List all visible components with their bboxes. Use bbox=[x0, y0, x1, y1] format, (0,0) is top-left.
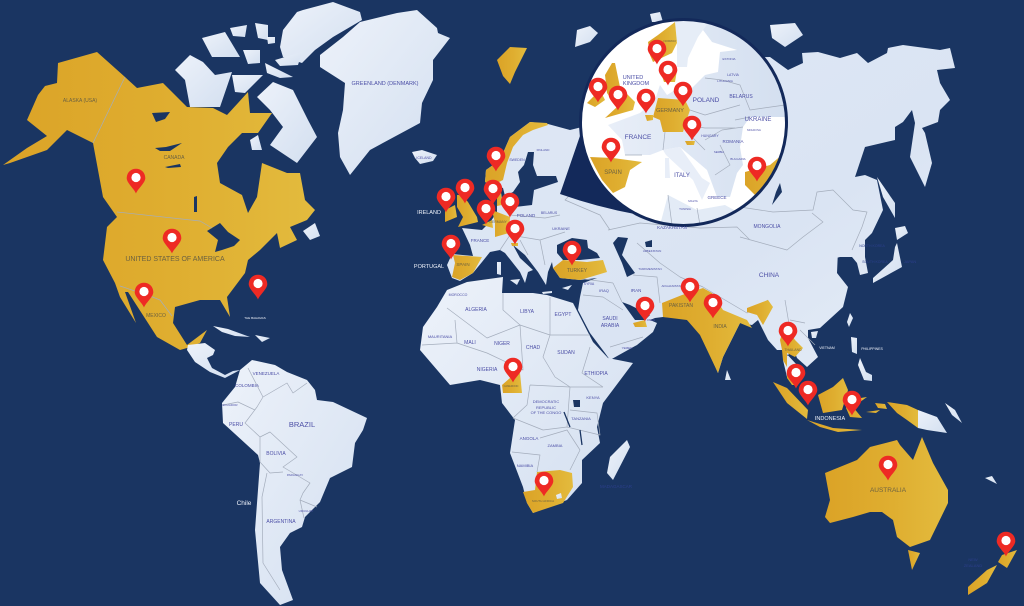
country labels: Africa: NAMIBIA bbox=[517, 463, 534, 468]
Great Lakes and Canadian lakes bbox=[152, 112, 240, 252]
South America bbox=[222, 360, 367, 605]
inset: borders bbox=[625, 78, 785, 225]
inset: country labels: GERMANY bbox=[656, 108, 684, 114]
location pins: Americas bbox=[127, 169, 267, 308]
inset: country labels: BULGARIA bbox=[730, 157, 746, 161]
country labels: Asia and Oceania: OMAN bbox=[647, 318, 655, 322]
New Zealand bbox=[968, 550, 1017, 595]
inset magnifier circle: Europe bbox=[579, 18, 788, 227]
inset: country labels: UNITED bbox=[623, 75, 643, 81]
inset: country labels: SPAIN bbox=[604, 170, 622, 176]
country labels: Africa: OF THE CONGO bbox=[531, 410, 561, 415]
country labels: Asia and Oceania: SAUDI bbox=[602, 316, 618, 322]
Central America bbox=[187, 343, 240, 378]
country labels: Greenland and Europe: UKRAINE bbox=[552, 226, 570, 231]
country labels: Africa: EGYPT bbox=[555, 312, 571, 318]
country labels: Asia and Oceania: SOUTH KOREA bbox=[862, 260, 888, 264]
country labels: Greenland and Europe: GERMANY bbox=[489, 220, 508, 224]
country labels: Greenland and Europe: TURKEY bbox=[567, 268, 588, 274]
Lesotho bbox=[556, 493, 562, 499]
country labels: Americas: UNITED STATES OF AMERICA bbox=[125, 256, 225, 263]
inland seas: Black Sea, Caspian, Persian Gulf, Aral, Baikal bbox=[557, 183, 782, 320]
country labels: Greenland and Europe: FINLAND bbox=[537, 148, 550, 152]
inset: Corsica and Sardinia bbox=[665, 158, 670, 178]
inset: European land bbox=[608, 24, 785, 197]
Mediterranean islands bbox=[497, 262, 572, 294]
country labels: Africa: ETHIOPIA bbox=[584, 371, 608, 377]
country labels: Africa: MAURITANIA bbox=[428, 334, 453, 339]
country labels: Americas: URUGUAY bbox=[299, 509, 313, 513]
country labels: Africa: MOROCCO bbox=[449, 293, 468, 297]
country labels: Asia and Oceania: PAKISTAN bbox=[669, 303, 693, 309]
North America gold landmass bbox=[3, 52, 315, 350]
country labels: Asia and Oceania: JAPAN bbox=[904, 259, 916, 264]
inset: country labels: MOLDOVA bbox=[747, 128, 761, 132]
South America borders bbox=[223, 368, 317, 590]
country labels: Americas: BRAZIL bbox=[289, 420, 315, 429]
country labels: Asia and Oceania: NEW bbox=[968, 557, 978, 562]
location pins: Asia and Oceania bbox=[636, 278, 1015, 556]
country labels: Greenland and Europe: FRANCE bbox=[471, 238, 489, 243]
inset: Italy bbox=[663, 147, 710, 200]
country labels: Asia and Oceania: AFGHANISTAN bbox=[661, 284, 683, 288]
Eurasia bbox=[447, 45, 955, 383]
inset: country labels bbox=[604, 39, 771, 211]
country labels: Africa: NIGERIA bbox=[477, 367, 498, 373]
country labels: Greenland and Europe: SWEDEN bbox=[509, 158, 525, 162]
country labels: Africa: SOUTH AFRICA bbox=[532, 499, 554, 503]
country labels: Americas: Chile bbox=[237, 500, 252, 507]
inset: country labels: TUNISIA bbox=[679, 207, 691, 211]
country labels: Asia and Oceania: MONGOLIA bbox=[754, 224, 781, 230]
country labels: Asia and Oceania: NORTH KOREA bbox=[859, 244, 885, 248]
country labels: Greenland and Europe: BELARUS bbox=[541, 211, 558, 215]
Asia-Pacific pale islands bbox=[725, 177, 997, 484]
country labels: Africa: SUDAN bbox=[557, 350, 575, 356]
country labels: Africa: CAMEROON bbox=[504, 385, 519, 388]
country labels: Americas: PERU bbox=[229, 422, 243, 428]
country labels: Asia and Oceania: AUSTRALIA bbox=[870, 487, 907, 494]
Madagascar bbox=[607, 440, 630, 480]
country labels: Africa: DEMOCRATIC bbox=[533, 399, 559, 404]
country labels: Americas: CANADA bbox=[164, 155, 185, 161]
country labels: Asia and Oceania: ZEALAND bbox=[964, 563, 982, 568]
country labels: Americas: ARGENTINA bbox=[266, 519, 296, 525]
inset: gold countries bbox=[587, 22, 790, 195]
inset: country labels: KINGDOM bbox=[623, 81, 650, 87]
country labels: Americas: ECUADOR bbox=[222, 403, 238, 407]
Greenland bbox=[320, 10, 450, 175]
country labels: Africa: KENYA bbox=[586, 395, 600, 400]
country labels: Asia and Oceania: SYRIA bbox=[584, 282, 595, 286]
country labels: Americas: VENEZUELA bbox=[253, 371, 279, 376]
Svalbard bbox=[497, 47, 527, 84]
country labels: Asia and Oceania: YEMEN bbox=[622, 346, 632, 350]
country labels: Americas: THE BAHAMAS bbox=[244, 316, 266, 320]
location pins: Africa bbox=[504, 358, 553, 496]
gold countries: Africa and Middle East bbox=[502, 320, 647, 513]
inset: country labels: LATVIA bbox=[727, 73, 740, 77]
inset: country labels: MALTA bbox=[688, 199, 698, 203]
inset: Sweden bbox=[675, 21, 707, 67]
country labels: Americas: MEXICO bbox=[146, 313, 166, 319]
inset: country labels: ROMANIA bbox=[722, 139, 744, 144]
country labels: Africa: CHAD bbox=[526, 345, 540, 351]
country labels: Asia and Oceania: CHINA bbox=[759, 272, 780, 279]
country labels: Africa bbox=[428, 293, 633, 503]
country labels: Africa: MALI bbox=[464, 340, 476, 346]
country labels: Africa: ANGOLA bbox=[520, 436, 538, 441]
country labels: Americas bbox=[63, 98, 315, 525]
northern islands bbox=[449, 12, 803, 240]
Africa bbox=[420, 277, 633, 513]
country labels: Greenland and Europe: POLAND bbox=[517, 213, 536, 218]
inset: country labels: FRANCE bbox=[625, 134, 652, 141]
country labels: Asia and Oceania: THAILAND bbox=[784, 348, 802, 352]
country labels: Asia and Oceania: PHILIPPINES bbox=[861, 347, 883, 351]
country labels: Greenland and Europe bbox=[352, 81, 687, 274]
country labels: Asia and Oceania: IRAQ bbox=[599, 288, 609, 293]
country labels: Americas: PARAGUAY bbox=[287, 473, 303, 477]
inset: country labels: GREECE bbox=[707, 195, 727, 200]
gold countries: Europe bbox=[445, 122, 607, 280]
country labels: Americas: BOLIVIA bbox=[266, 451, 286, 457]
Africa borders and lakes bbox=[422, 293, 603, 472]
inset: country labels: NORWAY bbox=[663, 39, 677, 43]
country labels: Africa: ZAMBIA bbox=[548, 443, 563, 448]
country labels: Greenland and Europe: GREENLAND (DENMARK) bbox=[352, 81, 419, 87]
inset: country labels: ESTONIA bbox=[722, 57, 736, 61]
inset: country labels: POLAND bbox=[693, 97, 720, 104]
inset: country labels: BELARUS bbox=[729, 94, 753, 100]
location pins: Europe bbox=[437, 147, 581, 266]
country labels: Asia and Oceania: VIETNAM bbox=[819, 346, 835, 350]
country labels: Asia and Oceania: IRAN bbox=[631, 288, 641, 293]
country labels: Asia and Oceania: UZBEKISTAN bbox=[643, 249, 661, 253]
country labels: Africa: NIGER bbox=[494, 341, 510, 347]
Canada and Mexico border lines bbox=[93, 77, 212, 316]
country labels: Asia and Oceania: INDIA bbox=[713, 324, 727, 330]
country labels: Asia and Oceania: ARABIA bbox=[601, 323, 620, 329]
inset: country labels: LITHUANIA bbox=[717, 79, 733, 83]
location pins: inset bbox=[589, 40, 766, 181]
inset: North Africa bbox=[661, 196, 734, 224]
country labels: Americas: ALASKA (USA) bbox=[63, 98, 97, 104]
Iceland bbox=[412, 150, 437, 164]
Tasmania bbox=[908, 550, 920, 570]
inset: circle ring bbox=[580, 20, 786, 226]
Australia bbox=[825, 437, 948, 547]
inset: country labels: SERBIA bbox=[714, 150, 724, 154]
Eurasia borders bbox=[500, 175, 867, 347]
country labels: Africa: MADAGASCAR bbox=[600, 484, 633, 489]
Caribbean islands bbox=[213, 326, 270, 342]
country labels: Asia and Oceania: TURKMENISTAN bbox=[638, 267, 662, 271]
country labels: Greenland and Europe: KAZAKHSTAN bbox=[657, 225, 687, 230]
country labels: Greenland and Europe: PORTUGAL bbox=[414, 264, 444, 270]
country labels: Africa: LIBYA bbox=[520, 309, 535, 315]
country labels: Africa: TANZANIA bbox=[571, 416, 591, 421]
country labels: Asia and Oceania bbox=[584, 224, 982, 568]
country labels: Greenland and Europe: SPAIN bbox=[456, 262, 470, 267]
gold countries: Pakistan, India, Southeast Asia bbox=[662, 288, 918, 432]
Arctic islands of Canada bbox=[175, 2, 362, 240]
zoom callout tail bbox=[560, 130, 640, 215]
country labels: Greenland and Europe: ICELAND bbox=[416, 156, 432, 160]
country labels: Africa: REPUBLIC bbox=[536, 405, 556, 410]
country labels: Africa: ALGERIA bbox=[465, 307, 487, 313]
inset: country labels: HUNGARY bbox=[701, 134, 719, 138]
country labels: Asia and Oceania: INDONESIA bbox=[815, 416, 845, 422]
inset: country labels: ITALY bbox=[674, 173, 690, 179]
country labels: Americas: COLOMBIA bbox=[235, 383, 259, 388]
inset: country labels: UKRAINE bbox=[745, 117, 771, 123]
country labels: Greenland and Europe: IRELAND bbox=[417, 210, 441, 216]
